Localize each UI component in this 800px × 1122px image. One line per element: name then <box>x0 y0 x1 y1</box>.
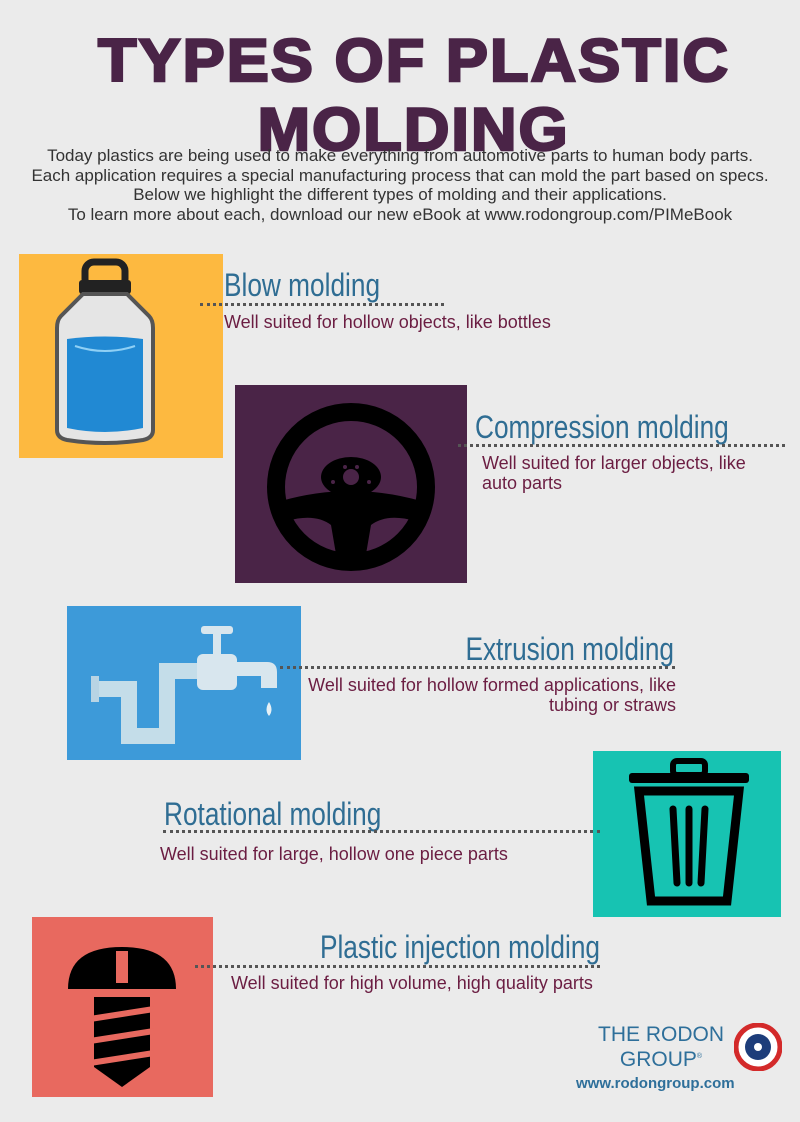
panel: extrusion molding icon <box>67 606 301 760</box>
intro text: To learn more about each, download our new eBook at www.rodongroup.com/PIMeBook <box>68 204 732 224</box>
desc: extrusion molding: Well suited for hollow formed applications, like <box>308 675 676 695</box>
desc: blow molding: Well suited for hollow objects, like bottles <box>224 312 551 332</box>
desc: extrusion molding <box>308 675 676 715</box>
desc: rotational molding: Well suited for large, hollow one piece parts <box>160 844 508 864</box>
icon: badge <box>734 1023 782 1071</box>
panel: compression molding icon <box>235 385 467 583</box>
intro text: Today plastics are being used to make everything from automotive parts to human body parts. <box>47 146 753 165</box>
intro text <box>31 146 769 224</box>
intro text: Each application requires a special manufacturing process that can mold the part based on specs. <box>31 166 769 184</box>
heading: blow molding: Blow molding <box>224 267 380 303</box>
desc: compression molding: auto parts <box>482 473 562 493</box>
logo: the rodon group: GROUP® <box>620 1048 702 1071</box>
heading: rotational molding: Rotational molding <box>164 796 381 832</box>
logo: the rodon group: www.rodongroup.com <box>576 1075 735 1092</box>
desc: compression molding <box>482 453 746 493</box>
panel: injection molding icon <box>32 917 213 1097</box>
title: TYPES OF PLASTIC <box>98 27 730 94</box>
heading: extrusion molding: Extrusion molding <box>465 631 674 667</box>
title: MOLDING <box>258 96 570 163</box>
panel: blow molding icon <box>19 254 223 458</box>
intro text: Below we highlight the different types of molding and their applications. <box>133 185 667 204</box>
desc: injection molding: Well suited for high volume, high quality parts <box>231 973 593 993</box>
desc: extrusion molding: tubing or straws <box>549 695 676 715</box>
logo: the rodon group <box>576 1023 782 1092</box>
panel: rotational molding icon <box>593 751 781 917</box>
heading: plastic injection molding: Plastic injection molding <box>320 929 600 965</box>
heading: compression molding: Compression molding <box>475 409 729 445</box>
desc: compression molding: Well suited for larger objects, like <box>482 453 746 473</box>
logo: the rodon group: THE RODON <box>598 1023 724 1046</box>
title <box>97 27 730 163</box>
